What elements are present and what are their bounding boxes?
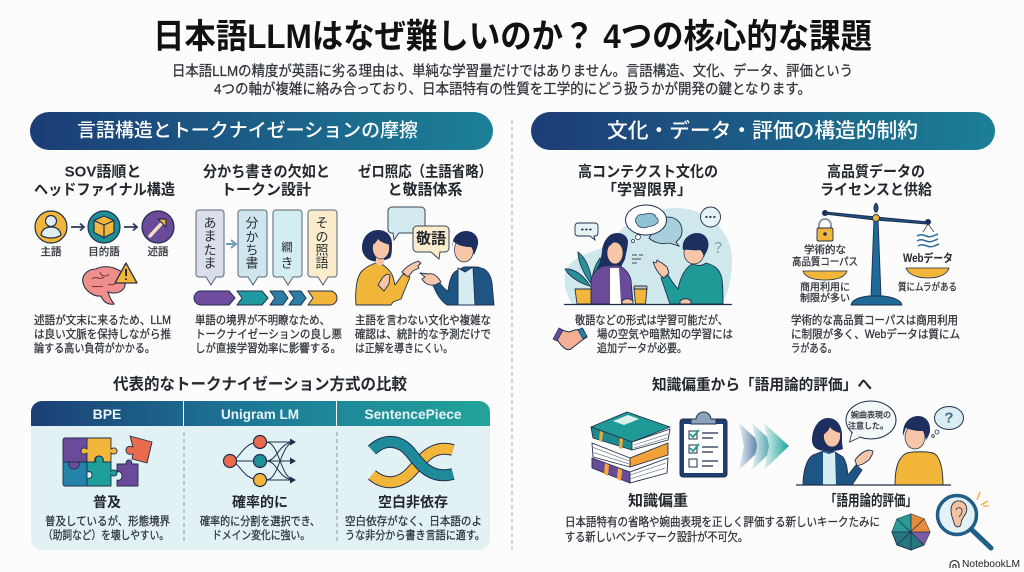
column: Unigram LM: Unigram LM bbox=[221, 406, 299, 422]
cup bbox=[634, 288, 647, 304]
plant bbox=[565, 252, 601, 286]
column: SentencePiece bbox=[345, 406, 485, 542]
description: は良い文脈を保持しながら推 bbox=[34, 327, 171, 341]
illustration: balance scale: 制限が多い bbox=[800, 292, 850, 304]
title: 日本語LLMはなぜ難しいのか？ 4つの核心的な課題 bbox=[153, 18, 872, 56]
description bbox=[195, 313, 342, 355]
panel: SOV word order bbox=[34, 164, 175, 355]
speech and thought bubbles: ？ bbox=[711, 240, 725, 256]
description bbox=[575, 313, 733, 355]
labels: before and after: 「語用論的評価」 bbox=[825, 492, 917, 510]
labels: before and after: 知識偏重 bbox=[628, 492, 688, 510]
heading: left section: 言語構造とトークナイゼーションの摩擦 bbox=[77, 120, 418, 142]
description bbox=[355, 313, 491, 355]
heading: high-context bbox=[578, 162, 718, 198]
description: ラがある。 bbox=[791, 341, 837, 355]
man bbox=[433, 267, 494, 305]
illustration: balance scale: 高品質コーパス bbox=[792, 255, 858, 268]
token bubbles bbox=[196, 210, 337, 285]
column: Unigram LM: ドメイン変化に強い。 bbox=[212, 529, 310, 542]
arrow bbox=[71, 224, 84, 230]
illustration: balance scale: 学術的な bbox=[804, 243, 846, 256]
arrow: chevrons bbox=[739, 423, 789, 470]
description: は正解を導きにくい。 bbox=[355, 341, 453, 355]
column: SentencePiece: SentencePiece bbox=[364, 406, 462, 422]
woman bbox=[362, 230, 392, 261]
heading: SOV bbox=[34, 164, 175, 198]
column: Unigram LM: 確率的に bbox=[232, 494, 288, 510]
labels: S O V: 目的語 bbox=[88, 245, 120, 258]
icon: object circle bbox=[88, 211, 120, 243]
column: SentencePiece: 空白依存がなく、日本語のよ bbox=[345, 514, 482, 528]
description: トークナイゼーションの良し悪 bbox=[195, 328, 342, 341]
icon: brain with warning bbox=[83, 263, 137, 304]
thought bubble bbox=[934, 406, 964, 430]
illustration: teacher and learner: 注意した。 bbox=[848, 420, 888, 430]
labels: before and after bbox=[628, 492, 917, 510]
column: SentencePiece: 空白非依存 bbox=[378, 494, 448, 510]
heading: segmentation: 分かち書きの欠如と bbox=[203, 162, 330, 180]
heading: zero anaphora: と敬語体系 bbox=[387, 182, 463, 198]
token bubbles: か bbox=[245, 230, 259, 244]
speech bubble bbox=[846, 401, 896, 439]
heading: SOV: SOV語順と bbox=[65, 164, 141, 180]
column: SentencePiece: うな非分から書き言語に適す。 bbox=[345, 528, 485, 542]
illustration: teacher and learner: ? bbox=[944, 410, 954, 426]
description: 学術的な高品質コーパスは商用利用 bbox=[791, 313, 958, 327]
token bubbles: 分 bbox=[245, 216, 259, 230]
heading: tokenization comparison: 代表的なトークナイゼーション方式の比較 bbox=[113, 374, 407, 394]
description: に制限が多く、Webデータは質にム bbox=[791, 327, 960, 341]
icon: puzzle bbox=[63, 436, 152, 486]
description: 敬語などの形式は学習可能だが、 bbox=[575, 313, 728, 327]
panel: pragmatic evaluation bbox=[565, 376, 991, 550]
icon: handshake bbox=[553, 328, 587, 350]
labels: S O V: 述語 bbox=[148, 245, 169, 258]
heading: data: 高品質データの bbox=[827, 162, 925, 180]
token bubbles: き bbox=[280, 256, 294, 270]
column: BPE: 普及 bbox=[93, 494, 121, 510]
illustration: teacher and learner bbox=[796, 401, 964, 485]
illustration: two people talking bbox=[356, 207, 494, 305]
heading: pragmatics: 知識偏重から「語用論的評価」へ bbox=[652, 376, 872, 394]
right pan bbox=[906, 268, 949, 278]
token bubbles: 書 bbox=[245, 256, 259, 270]
token bubbles: 照 bbox=[315, 242, 329, 258]
intro text: 日本語LLMの精度が英語に劣る理由は、単純な学習量だけではありません。言語構造、文化、データ、評価という bbox=[172, 62, 853, 80]
heading: segmentation: トークン設計 bbox=[221, 182, 311, 198]
woman bbox=[812, 418, 843, 451]
heading: left section bbox=[30, 112, 493, 150]
icon: interlocked ribbon bbox=[372, 442, 453, 482]
token bubbles: の bbox=[315, 230, 329, 244]
token bubbles: ま bbox=[203, 256, 217, 270]
arrow bbox=[124, 224, 137, 230]
panel: word segmentation bbox=[194, 162, 342, 355]
woman bbox=[591, 233, 633, 304]
description bbox=[791, 313, 960, 355]
description: する新しいベンチマーク設計が不可欠。 bbox=[565, 530, 748, 544]
token bar bbox=[194, 291, 337, 305]
column: BPE: BPE bbox=[93, 406, 121, 422]
heading: data bbox=[820, 162, 932, 198]
token bubbles: ち bbox=[245, 242, 259, 258]
token bubbles: 繝 bbox=[281, 241, 293, 254]
token bubbles: た bbox=[203, 242, 217, 258]
panel: zero anaphora and honorifics bbox=[355, 162, 494, 355]
heading: right section: 文化・データ・評価の構造的制約 bbox=[607, 118, 918, 142]
man bbox=[895, 452, 943, 485]
token bubbles: ま bbox=[203, 228, 217, 244]
icon: clipboard bbox=[680, 412, 727, 477]
icon: network bbox=[224, 436, 296, 486]
labels: S O V bbox=[40, 245, 169, 258]
panel: high-context culture bbox=[553, 162, 733, 355]
waves bbox=[917, 234, 939, 247]
lock bbox=[819, 219, 831, 228]
illustration: conversation bbox=[564, 205, 732, 304]
intro text: 4つの軸が複雑に絡み合っており、日本語特有の性質を工学的にどう扱うかが開発の鍵となります。 bbox=[214, 80, 811, 98]
column: Unigram LM bbox=[200, 406, 320, 542]
heading: zero anaphora: ゼロ照応（主語省略） bbox=[358, 162, 492, 180]
description: 場の空気や暗黙知の学習には bbox=[597, 327, 733, 341]
speech and thought bubbles bbox=[575, 205, 725, 263]
column: Unigram LM: 確率的に分割を選択でき、 bbox=[200, 514, 320, 528]
description: 主語を言わない文化や複雑な bbox=[355, 313, 491, 327]
token bubbles: そ bbox=[315, 216, 329, 230]
description: 確認は、統計的な予測だけで bbox=[355, 327, 491, 341]
description: 単語の境界が不明瞭なため、 bbox=[195, 313, 330, 327]
column: BPE bbox=[43, 406, 170, 542]
description: 日本語特有の省略や婉曲表現を正しく評価する新しいキークたみに bbox=[565, 515, 880, 529]
column: BPE: 普及しているが、形態境界 bbox=[45, 514, 170, 528]
illustration: balance scale: 質にムラがある bbox=[898, 280, 957, 294]
description bbox=[34, 313, 171, 355]
token bubbles: あ bbox=[203, 216, 217, 230]
heading: right section bbox=[531, 112, 995, 150]
icon: books bbox=[591, 412, 670, 483]
icon: predicate circle bbox=[142, 211, 174, 243]
illustration: balance scale: 商用利用に bbox=[800, 280, 850, 294]
heading: high-context: 「学習限界」 bbox=[602, 180, 692, 198]
illustration: teacher and learner: 婉曲表現の bbox=[851, 410, 891, 420]
heading: high-context: 高コンテクスト文化の bbox=[578, 162, 718, 180]
description: 追加データが必要。 bbox=[597, 341, 687, 355]
column: BPE: （助詞など）を壊しやすい。 bbox=[43, 528, 169, 542]
illustration: balance scale: Webデータ bbox=[903, 251, 953, 265]
heading: data: ライセンスと供給 bbox=[820, 182, 932, 198]
icon: magnifier with ear bbox=[938, 492, 991, 548]
description: 述語が文末に来るため、LLM bbox=[34, 313, 171, 327]
heading: SOV: ヘッドファイナル構造 bbox=[34, 180, 175, 198]
icon: subject circle bbox=[35, 211, 67, 243]
illustration: two people talking: 敬語 bbox=[416, 230, 446, 248]
icon: geometric polygon bbox=[892, 514, 930, 550]
illustration: balance scale bbox=[792, 203, 957, 305]
panel: data license and supply bbox=[791, 162, 960, 355]
intro text bbox=[172, 62, 853, 98]
description: しが直接学習効率に影響する。 bbox=[195, 341, 341, 355]
left pan bbox=[803, 271, 847, 280]
token bubbles: 語 bbox=[315, 256, 329, 270]
description: 論する高い負荷がかかる。 bbox=[34, 341, 155, 355]
pot bbox=[575, 289, 592, 304]
heading: zero anaphora bbox=[358, 162, 492, 198]
panel: comparison table bbox=[31, 401, 490, 550]
heading: segmentation bbox=[203, 162, 330, 198]
labels: S O V: 主語 bbox=[40, 246, 62, 258]
logo: NotebookLM: NotebookLM bbox=[962, 558, 1020, 570]
man bbox=[653, 233, 723, 304]
description bbox=[565, 515, 880, 544]
